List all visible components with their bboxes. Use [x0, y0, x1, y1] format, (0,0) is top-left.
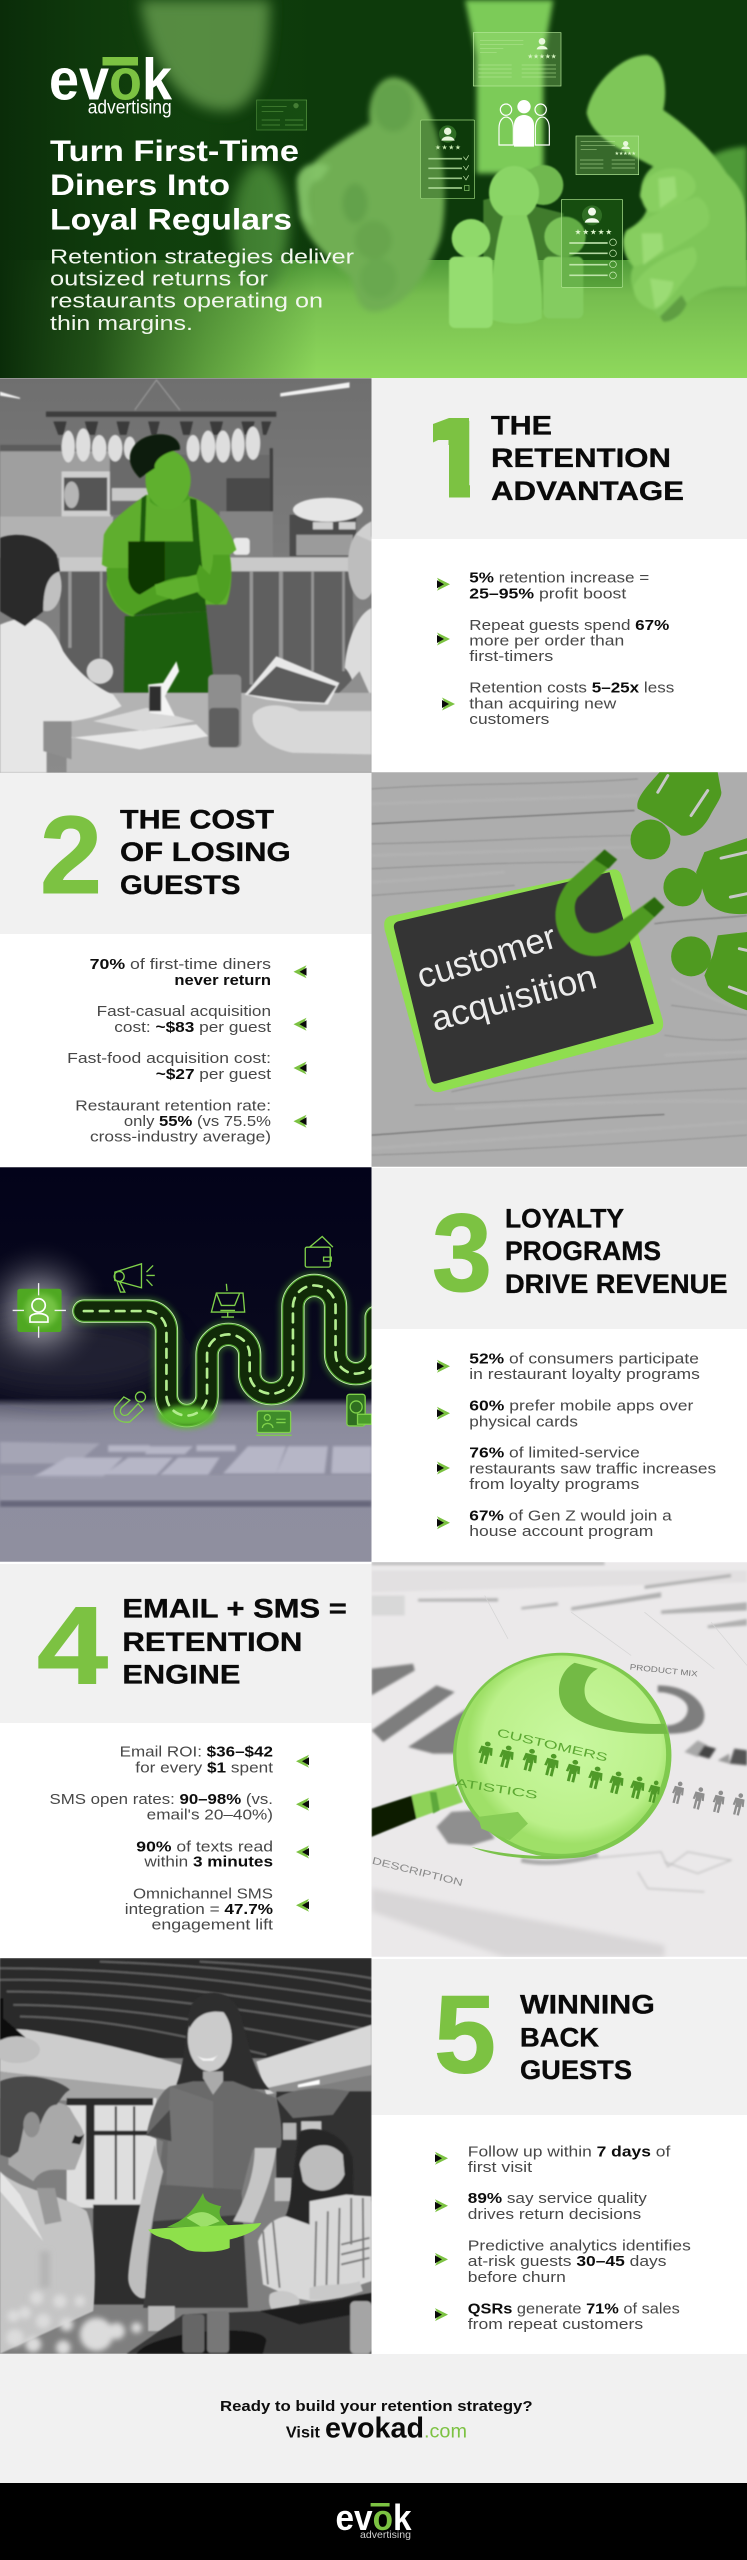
bullet list 3: 67% of Gen Z would join a — [469, 1508, 673, 1525]
heading: loyalty programs drive revenue — [505, 1203, 728, 1299]
bullet list 5: Follow up within 7 days of — [468, 2143, 671, 2160]
icon: person target — [13, 1283, 66, 1338]
bullet list 4: 90% of texts read — [136, 1838, 273, 1855]
bullet list 1: more per order than — [469, 633, 624, 650]
heading: the retention advantage: RETENTION — [491, 443, 671, 473]
bullet list 3: 60% prefer mobile apps over — [469, 1398, 693, 1415]
photo: waiter at table in green — [0, 378, 372, 773]
bullet list 3: house account program — [469, 1523, 653, 1540]
heading: the cost of losing guests: THE COST — [120, 804, 275, 834]
bullet list 4: email's 20–40%) — [147, 1807, 273, 1824]
left gray header — [0, 1564, 372, 1723]
subtitle: thin margins. — [50, 313, 193, 335]
bullet list 4: integration = 47.7% — [125, 1901, 273, 1918]
bullet list 5: at-risk guests 30–45 days — [468, 2253, 666, 2270]
green plate and salad — [148, 2193, 261, 2252]
bullet list 3: in restaurant loyalty programs — [469, 1366, 700, 1383]
website link: evokad — [325, 2412, 424, 2444]
bullet list 2: only 55% (vs 75.5% — [124, 1113, 271, 1130]
bullet list 1 — [437, 570, 674, 728]
glass card bottom — [561, 199, 623, 287]
glass card top: ★★★★★ — [527, 53, 557, 61]
waiter — [102, 434, 236, 693]
bullet list 3: 52% of consumers participate — [469, 1350, 699, 1367]
faint card left — [257, 100, 307, 130]
numeral 3: 3 — [432, 1192, 492, 1315]
photo: magnifying glass over customer statistics — [371, 1562, 747, 1957]
right gray header — [372, 1959, 747, 2115]
heading: loyalty programs drive revenue: DRIVE REVENUE — [505, 1269, 728, 1299]
bullet list 5 — [435, 2143, 691, 2333]
bullet list 1: 5% retention increase = — [469, 570, 650, 587]
numeral 4: 4 — [37, 1584, 108, 1707]
footer logo: evok — [336, 2497, 412, 2538]
heading: email + sms = retention engine: RETENTION — [122, 1627, 302, 1657]
magnet — [555, 849, 664, 956]
panel: section 4 — [0, 1562, 747, 1957]
bullet list 4: SMS open rates: 90–98% (vs. — [50, 1791, 273, 1808]
heading: winning back guests: WINNING — [520, 1990, 655, 2020]
heading: loyalty programs drive revenue: PROGRAMS — [505, 1236, 661, 1266]
left gray header — [0, 773, 372, 934]
numeral 1: 1 — [416, 398, 495, 521]
lens — [453, 1653, 671, 1859]
bullet list 3: 76% of limited-service — [469, 1445, 640, 1462]
panel: section 5 — [0, 1958, 747, 2355]
keyboard — [0, 1442, 372, 1477]
icons along road — [114, 1237, 372, 1435]
chalk text: acquisition — [427, 957, 601, 1039]
bullet list 2: 70% of first-time diners — [90, 956, 271, 973]
glass card right — [576, 136, 639, 175]
bullet list 4: engagement lift — [152, 1916, 274, 1933]
photo: waitress serving green salad — [0, 1958, 372, 2354]
bullet list 1: than acquiring new — [469, 695, 616, 712]
bullet list 3 — [437, 1350, 716, 1540]
website link: Visit — [286, 2424, 321, 2441]
bullet list 4: Omnichannel SMS — [133, 1885, 273, 1902]
bullet list 5: Predictive analytics identifies — [468, 2238, 691, 2254]
lens text — [454, 1727, 609, 1802]
bullet list 5: before churn — [468, 2269, 566, 2286]
panel: section 3 — [0, 1167, 747, 1562]
gray background labels: PRODUCT MIX — [629, 1662, 699, 1679]
subtitle: restaurants operating on — [50, 291, 323, 313]
heading: email + sms = retention engine — [122, 1594, 347, 1689]
panel: section 2 — [0, 772, 747, 1167]
lens text: CUSTOMERS — [496, 1727, 609, 1765]
road — [84, 1285, 376, 1416]
logo: evok advertising: evok — [49, 47, 173, 112]
bullet list 5: QSRs generate 71% of sales — [468, 2300, 680, 2317]
bullet list 2: ~$27 per guest — [156, 1066, 272, 1083]
call to action band — [0, 2354, 747, 2483]
bullet list 5: first visit — [468, 2159, 533, 2176]
heading: loyalty programs drive revenue: LOYALTY — [505, 1203, 624, 1233]
title: Diners Into — [50, 169, 230, 202]
footer band — [0, 2483, 747, 2560]
heading: winning back guests: GUESTS — [520, 2055, 632, 2085]
bullet list 2 — [67, 956, 306, 1145]
bullet list 3: from loyalty programs — [469, 1476, 639, 1493]
bullet list 4 — [50, 1744, 309, 1933]
waitress — [128, 1993, 282, 2331]
gray background labels: DESCRIPTION — [371, 1856, 464, 1889]
heading: the retention advantage: THE — [491, 410, 552, 440]
glass card left: ★★★★ — [435, 144, 461, 152]
glass card left — [421, 120, 475, 199]
subtitle — [50, 246, 354, 335]
logo: evok advertising: advertising — [88, 98, 172, 118]
glass card top — [473, 33, 561, 86]
diners and table — [0, 521, 378, 773]
bullet list 3: physical cards — [469, 1413, 578, 1430]
heading: the cost of losing guests: GUESTS — [120, 870, 240, 900]
website link — [286, 2412, 467, 2444]
bullet list 5: 89% say service quality — [468, 2190, 647, 2207]
woman at right — [258, 2129, 372, 2314]
man at left — [0, 2077, 95, 2354]
bullet list 4: for every $1 spent — [135, 1760, 274, 1777]
subtitle: Retention strategies deliver — [50, 246, 354, 268]
chalk text — [412, 917, 601, 1039]
bullet list 5: from repeat customers — [468, 2316, 643, 2333]
title: Turn First-Time — [50, 135, 299, 168]
title — [50, 135, 299, 236]
call to action text: Ready to build your retention strategy? — [220, 2398, 533, 2415]
heading: email + sms = retention engine: ENGINE — [122, 1659, 240, 1689]
bullet list 1: first-timers — [469, 648, 553, 665]
heading: the retention advantage: ADVANTAGE — [491, 476, 684, 506]
bullet list 2: cross-industry average) — [90, 1128, 271, 1145]
numeral 5: 5 — [434, 1974, 496, 2096]
dark fade over left of photo — [0, 0, 317, 378]
title: Loyal Regulars — [50, 203, 292, 236]
bullet list 2: never return — [174, 972, 271, 989]
panel: section 1 — [0, 378, 747, 773]
heading: winning back guests — [520, 1990, 655, 2085]
bullet list 2: Fast-food acquisition cost: — [67, 1050, 271, 1067]
bullet list 1: customers — [469, 711, 549, 728]
bullet list 1: 25–95% profit boost — [469, 585, 627, 602]
photo: chalkboard and magnet — [372, 772, 747, 1167]
bullet list 5: drives return decisions — [468, 2206, 641, 2223]
footer logo: advertising — [360, 2529, 411, 2541]
hero photo: hands protecting wooden figures — [0, 0, 747, 378]
glass card bottom: ★★★★★ — [575, 228, 612, 237]
heading: email + sms = retention engine: EMAIL + SMS = — [122, 1594, 347, 1624]
right gray header — [372, 1168, 747, 1329]
felt people — [630, 772, 747, 1010]
bullet list 2: Restaurant retention rate: — [75, 1097, 271, 1114]
chalk text: customer — [412, 917, 561, 996]
right gray header — [372, 378, 747, 539]
bullet list 4: Email ROI: $36–$42 — [120, 1744, 273, 1761]
magnifier handle — [372, 1784, 463, 1837]
bullet list 2: cost: ~$83 per guest — [114, 1019, 272, 1036]
bullet list 1: Retention costs 5–25x less — [469, 679, 674, 696]
icon: team of three people — [499, 100, 549, 147]
gray background labels — [371, 1662, 699, 1889]
numeral 1 — [433, 418, 470, 498]
bullet list 3: restaurants saw traffic increases — [469, 1460, 716, 1477]
glass card right: ★★★★★ — [615, 151, 637, 157]
hero banner — [0, 0, 747, 378]
numeral 2: 2 — [40, 794, 102, 917]
table and bokeh — [126, 2293, 372, 2354]
bullet list 1: Repeat guests spend 67% — [469, 617, 669, 634]
heading: the cost of losing guests: OF LOSING — [120, 837, 291, 867]
heading: the retention advantage — [491, 410, 684, 506]
lens text: ATISTICS — [454, 1777, 539, 1802]
bullet list 4: within 3 minutes — [143, 1854, 273, 1871]
subtitle: outsized returns for — [50, 269, 268, 291]
heading: winning back guests: BACK — [520, 2022, 600, 2052]
heading: the cost of losing guests — [120, 804, 291, 900]
blurred shape top left — [140, 0, 270, 111]
photo: customer journey road — [0, 1167, 372, 1562]
website link: .com — [424, 2421, 467, 2442]
bullet list 2: Fast-casual acquisition — [97, 1003, 271, 1020]
